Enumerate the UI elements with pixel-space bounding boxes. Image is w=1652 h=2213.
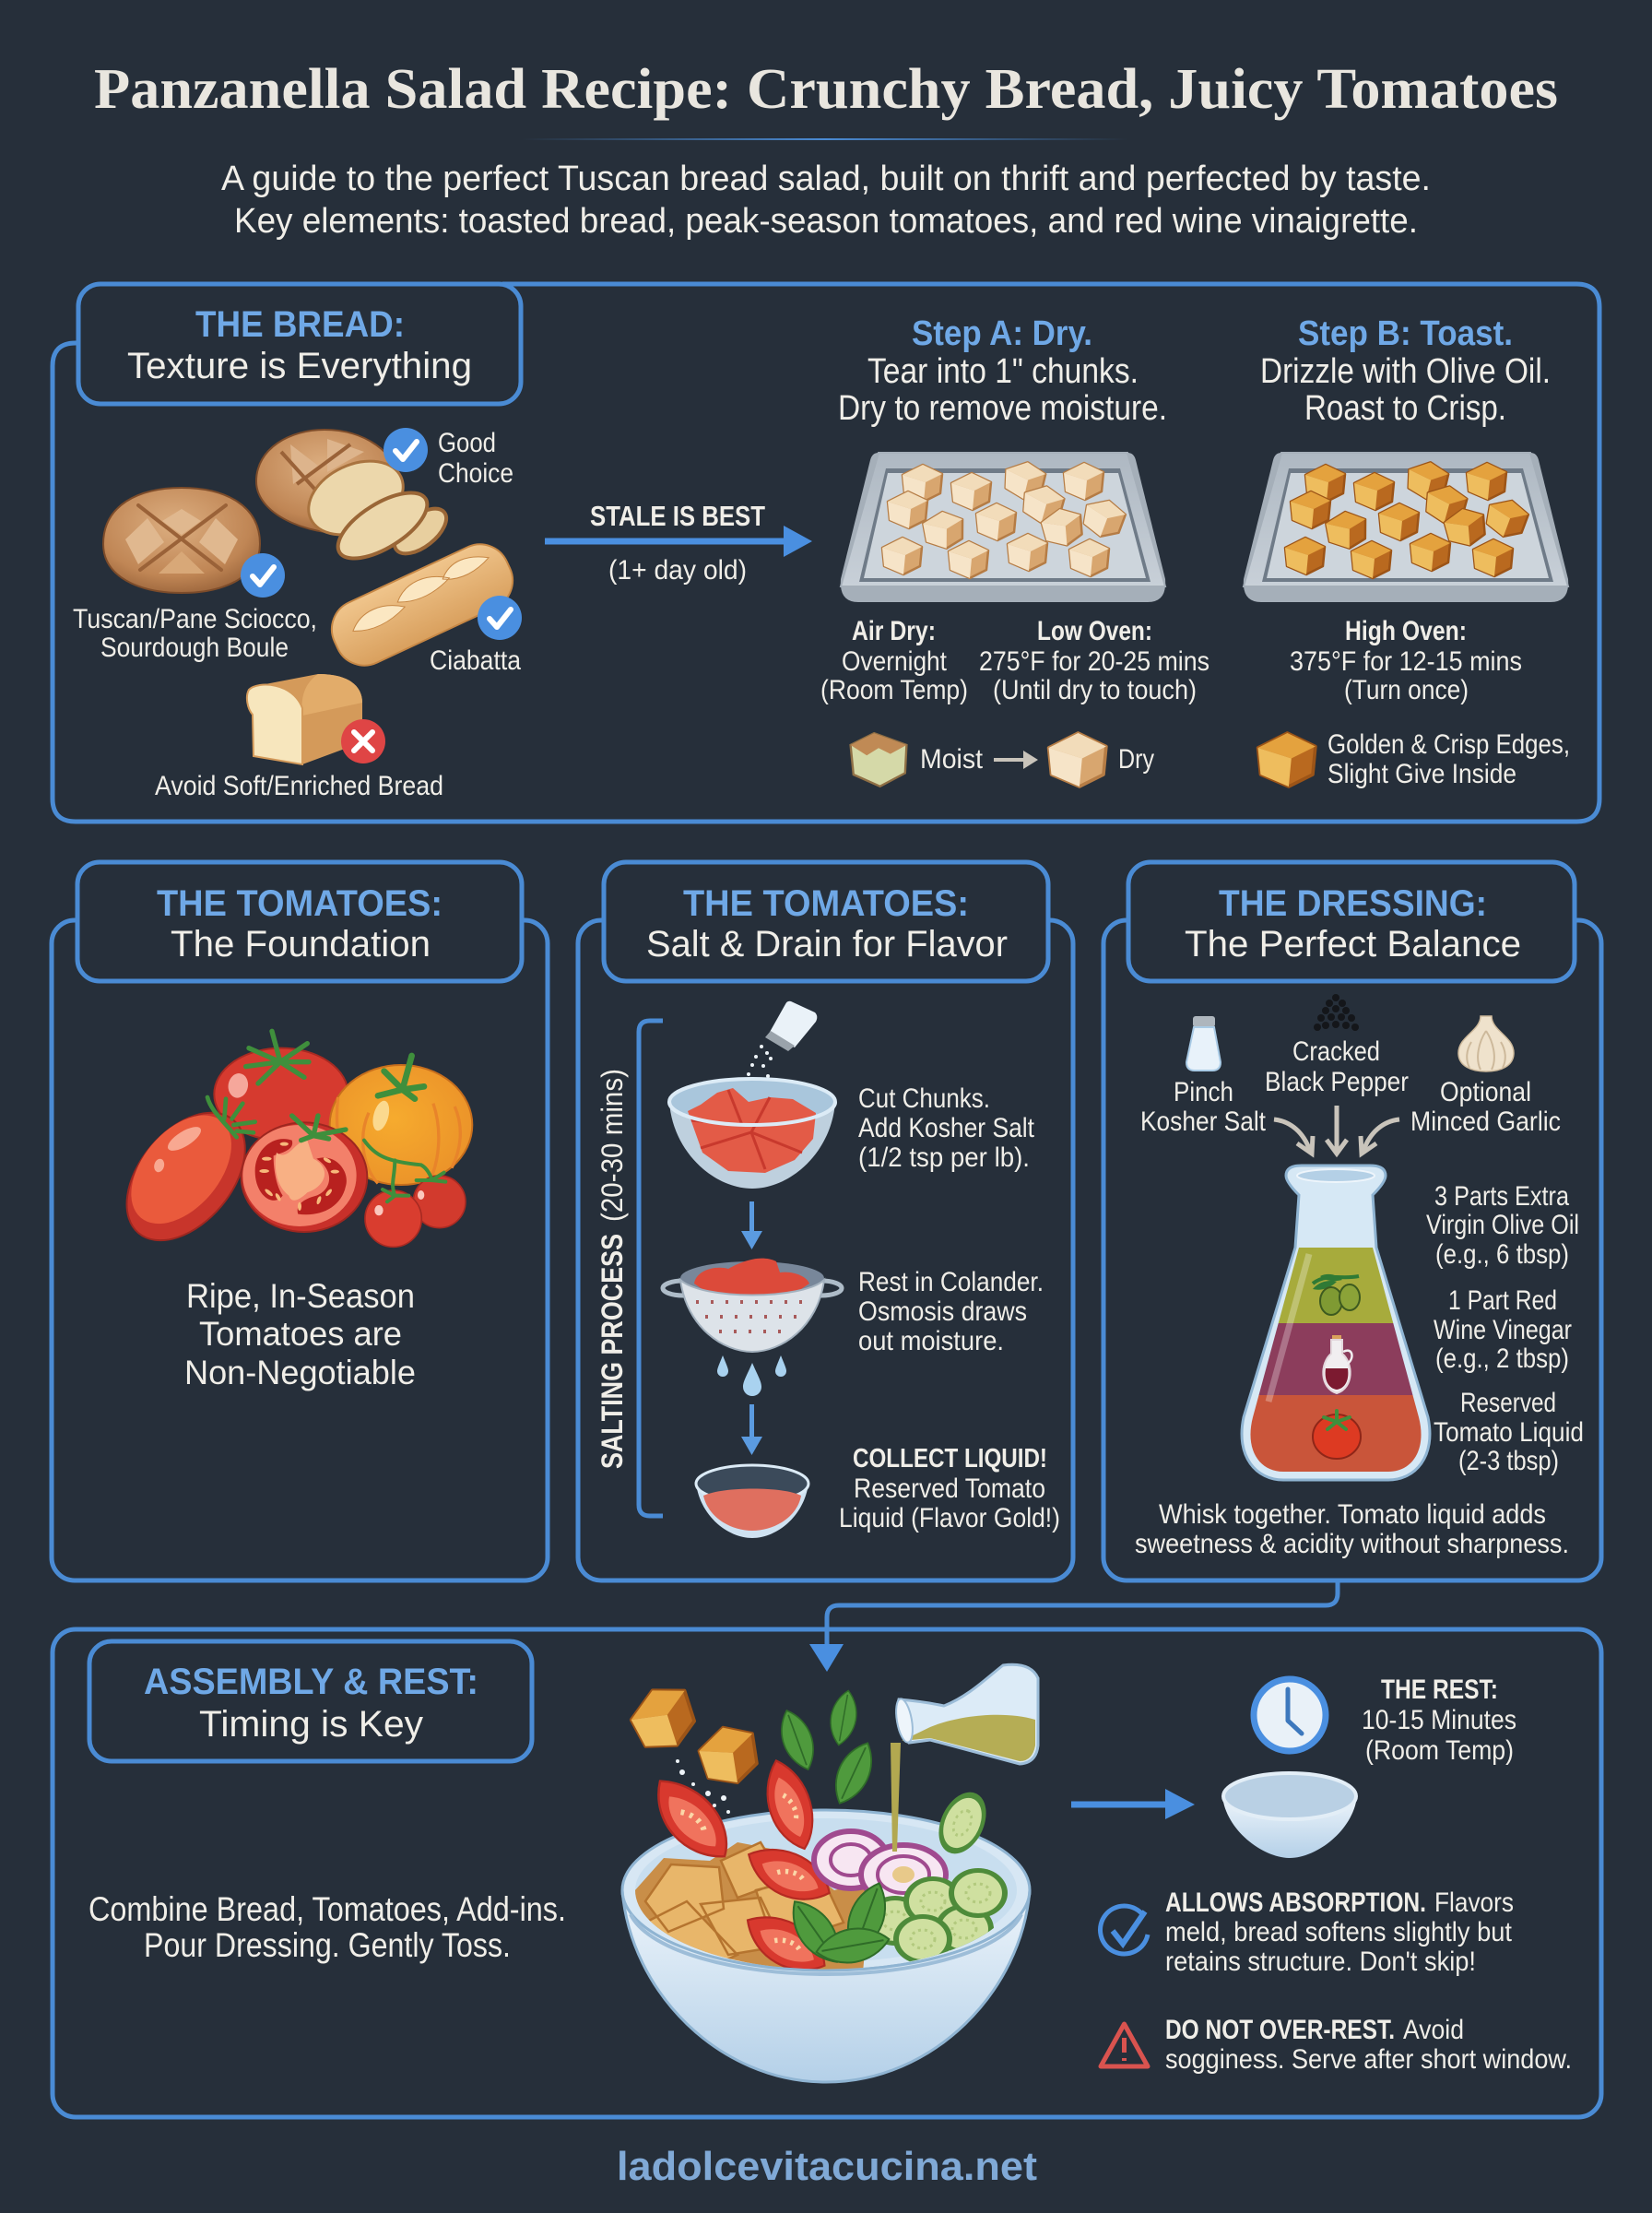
icon: avoid x [341,719,385,763]
text: the rest: (Room Temp) [1365,1735,1514,1766]
text: low oven [979,616,1210,705]
text: collect liquid [839,1444,1060,1533]
icon: sliced loaf [256,430,454,571]
text: high oven: High Oven: [1345,616,1467,646]
text: step a: Tear into 1" chunks. [867,352,1139,391]
icon: dressing pour [891,1664,1038,1852]
text: pinch kosher salt: Kosher Salt [1140,1106,1267,1137]
arrow: connector to assembly [809,1581,1338,1672]
icon: sandwich loaf [247,674,362,764]
icon: good check 2 [384,428,428,472]
text: high oven: (Turn once) [1344,675,1469,705]
heading: the foundation [77,862,522,981]
icon: tomato [1313,1411,1361,1459]
icon: colander [663,1259,842,1352]
heading: salt and drain [604,862,1048,981]
arrow: bowl to colander [741,1201,762,1249]
icon: salad bowl [622,1810,1030,2082]
text: cracked black pepper: Black Pepper [1265,1067,1409,1097]
text: collect liquid: Reserved Tomato [854,1473,1045,1504]
text: cracked black pepper [1265,1036,1409,1097]
icon: ciabatta [322,535,523,675]
text: optional garlic [1410,1077,1561,1137]
text: do not over-rest: sogginess. Serve after short window. [1165,2044,1572,2075]
icon: tray with drying bread [841,453,1165,602]
arrows: into flask [1274,1106,1399,1154]
text: collect liquid: COLLECT LIQUID! [853,1444,1047,1473]
arrow: stale is best [545,500,812,586]
subtitle: Key elements: toasted bread, peak-season tomatoes, and red wine vinaigrette. [234,202,1418,241]
text: step b: Drizzle with Olive Oil. [1260,352,1551,391]
icon: olives [1313,1274,1360,1315]
text: rest in colander: Rest in Colander. [858,1267,1044,1297]
text: vinegar parts: 1 Part Red [1448,1285,1557,1316]
text: collect liquid: Liquid (Flavor Gold!) [839,1503,1060,1533]
icon: check circle [1100,1906,1148,1954]
text: ripe tomatoes: Tomatoes are [199,1315,402,1353]
icon: peppercorns [1314,994,1359,1031]
text: whisk together: sweetness & acidity without sharpness. [1135,1529,1569,1559]
icon: basil leaves [773,1688,881,1809]
text: olive oil parts: Virgin Olive Oil [1426,1210,1579,1240]
text: high oven: 375°F for 12-15 mins [1290,646,1522,677]
text: do not over-rest: DO NOT OVER-REST. [1165,2015,1395,2045]
heading: the bread: THE BREAD: [195,304,405,345]
heading: assembly [89,1641,532,1761]
text: reserved liquid [1434,1388,1584,1476]
text: the rest: THE REST: [1381,1675,1498,1705]
icon: tomato wedges [658,1760,829,1856]
text: golden [1328,729,1570,789]
icon: salt jar [1186,1016,1221,1071]
text: combine: Pour Dressing. Gently Toss. [144,1926,511,1964]
arrow: stale is best: STALE IS BEST [590,500,765,532]
text: allows absorption: retains structure. Don't skip! [1165,1947,1476,1977]
text: tuscan [73,604,317,663]
icon: tray with toasted bread [1244,453,1568,602]
text: pinch kosher salt [1140,1077,1267,1137]
heading: the bread [78,284,521,404]
subtitle [221,160,1431,241]
heading: assembly: ASSEMBLY & REST: [144,1662,478,1702]
icon: flask of dressing [1235,1166,1438,1480]
text: pinch kosher salt: Pinch [1174,1077,1233,1107]
text: high oven [1290,616,1522,705]
text: olive oil parts [1426,1181,1579,1270]
text: reserved liquid: Tomato Liquid [1434,1417,1584,1448]
icon: tomato group [103,1031,472,1262]
text: reserved liquid: (2-3 tbsp) [1458,1446,1559,1476]
text: good choice: Choice [438,458,513,489]
text: olive oil parts: 3 Parts Extra [1434,1181,1569,1212]
text: good choice: Good [438,428,496,458]
text: optional garlic: Minced Garlic [1410,1106,1561,1137]
text: rest in colander: Osmosis draws [858,1296,1027,1327]
arrow: to rest [1071,1789,1195,1819]
icon: good check 3 [478,596,522,640]
text: tuscan: Tuscan/Pane Sciocco, [73,604,317,634]
icon: garlic [1458,1016,1514,1071]
text: ripe tomatoes: Non-Negotiable [184,1354,416,1391]
text: avoid: Avoid Soft/Enriched Bread [155,771,443,801]
arrow: colander to bowl [741,1404,762,1455]
panel: salt and drain [578,862,1073,1580]
text: air dry: Overnight [842,646,948,677]
icon: clock [1254,1679,1326,1751]
title: Panzanella Salad Recipe: Crunchy Bread, Juicy Tomatoes [94,58,1558,121]
text: the rest: 10-15 Minutes [1362,1705,1516,1735]
icon: falling croutons [625,1677,762,1791]
text: ripe tomatoes [184,1277,416,1391]
icon: moist cube [851,733,906,787]
text: step a [838,314,1167,428]
heading: dressing: THE DRESSING: [1219,883,1487,924]
panel: tomatoes foundation [52,862,548,1580]
text: low oven: (Until dry to touch) [993,675,1197,705]
text: moist: Moist [920,744,984,775]
heading: the foundation: The Foundation [171,924,431,964]
text: step b [1260,314,1551,428]
heading: the foundation: THE TOMATOES: [157,883,442,924]
icon: sourdough boule [103,488,260,593]
text: step b: Roast to Crisp. [1304,389,1506,428]
panel: dressing [1103,862,1601,1580]
text: low oven: Low Oven: [1037,616,1152,646]
text: step a: Step A: Dry. [912,314,1092,353]
text: vinegar parts: Wine Vinegar [1434,1315,1572,1345]
text: salting process: (20-30 mins) [596,1069,629,1222]
heading: assembly: Timing is Key [199,1704,423,1745]
footer: ladolcevitacucina.net [617,2144,1037,2189]
text: step b: Step B: Toast. [1298,314,1513,353]
text: air dry [820,616,968,705]
text: cracked black pepper: Cracked [1292,1036,1380,1067]
heading: dressing [1128,862,1575,981]
icon: bowl of cut tomatoes [669,1079,835,1189]
text: allows absorption: Flavors [1434,1888,1514,1918]
icon: good check 1 [241,553,285,598]
text: vinegar parts: (e.g., 2 tbsp) [1435,1343,1569,1374]
text: olive oil parts: (e.g., 6 tbsp) [1435,1239,1569,1270]
icon: golden cube [1258,733,1316,787]
text: low oven: 275°F for 20-25 mins [979,646,1210,677]
text: air dry: Air Dry: [852,616,936,646]
text: dry: Dry [1118,744,1154,775]
text: ciabatta: Ciabatta [430,645,521,676]
heading: salt and drain: Salt & Drain for Flavor [646,924,1008,964]
text: step a: Dry to remove moisture. [838,389,1167,428]
text: air dry: (Room Temp) [820,675,968,705]
text: combine [88,1890,566,1964]
panel: the bread [53,284,1599,822]
text: golden: Golden & Crisp Edges, [1328,729,1570,760]
text: allows absorption [1165,1888,1514,1977]
arrow: moist to dry [994,751,1038,769]
heading: the bread: Texture is Everything [127,346,472,386]
text: rest in colander: out moisture. [858,1326,1004,1356]
text: golden: Slight Give Inside [1328,759,1516,789]
text: salting process: SALTING PROCESS [596,1234,629,1469]
text: do not over-rest [1165,2015,1572,2075]
heading: salt and drain: THE TOMATOES: [683,883,969,924]
text: cut chunks [858,1083,1035,1173]
heading: dressing: The Perfect Balance [1185,924,1521,964]
text: cut chunks: (1/2 tsp per lb). [858,1142,1030,1173]
text: whisk together [1135,1499,1569,1559]
panel: assembly and rest [53,1581,1601,2117]
text: do not over-rest: Avoid [1403,2015,1464,2045]
icon: dry cube [1049,733,1106,787]
text: reserved liquid: Reserved [1460,1388,1556,1418]
icon: bowl of liquid [696,1465,808,1538]
text: salting process [596,1069,629,1469]
text: cut chunks: Add Kosher Salt [858,1113,1035,1143]
icon: floating cucumber [929,1784,996,1862]
subtitle: A guide to the perfect Tuscan bread salad, built on thrift and perfected by taste. [221,160,1431,198]
text: rest in colander [858,1267,1044,1356]
text: the rest [1362,1675,1516,1766]
text: vinegar parts [1434,1285,1572,1374]
icon: vinegar bottle [1323,1335,1351,1393]
text: optional garlic: Optional [1440,1077,1531,1107]
text: combine: Combine Bread, Tomatoes, Add-ins. [88,1890,566,1928]
icon: salt shaker [747,1001,817,1083]
icon: seasoning [676,1759,730,1814]
text: good choice [438,428,513,489]
text: allows absorption: meld, bread softens slightly but [1165,1917,1513,1947]
arrow: stale is best: (1+ day old) [608,555,747,586]
bracket: salting process [639,1021,663,1516]
icon: warning triangle [1101,2024,1148,2066]
text: cut chunks: Cut Chunks. [858,1083,990,1114]
text: tuscan: Sourdough Boule [100,633,289,663]
icon: water drops [717,1355,786,1396]
text: ripe tomatoes: Ripe, In-Season [186,1277,415,1315]
text: whisk together: Whisk together. Tomato liquid adds [1159,1499,1546,1530]
text: allows absorption: ALLOWS ABSORPTION. [1165,1888,1426,1918]
icon: small bowl [1222,1773,1357,1858]
